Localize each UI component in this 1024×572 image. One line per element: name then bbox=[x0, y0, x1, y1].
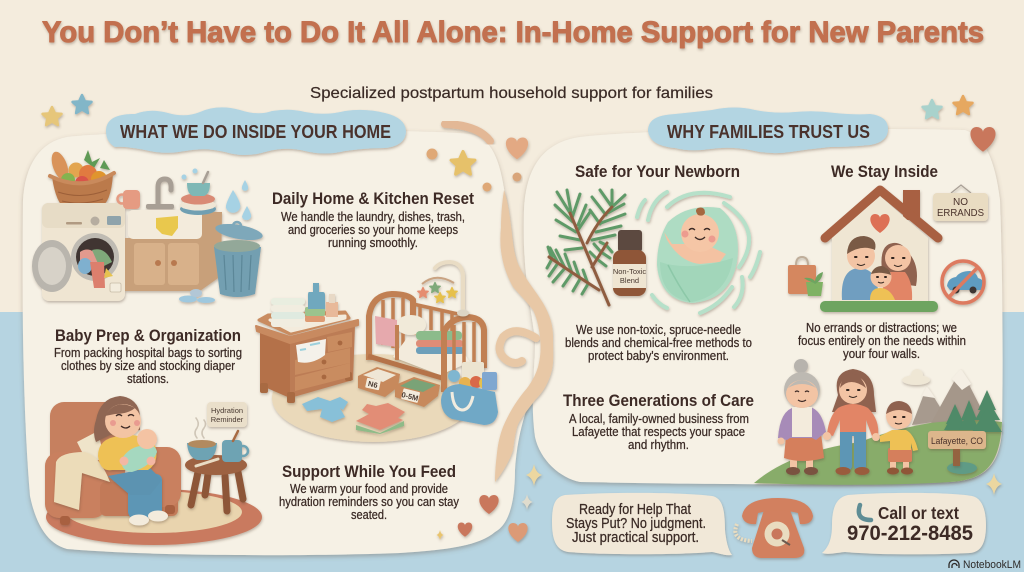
text: support while you feed bbox=[279, 462, 460, 522]
icon: steam bbox=[195, 418, 206, 438]
decor: heart top right bbox=[970, 127, 996, 152]
icon: non-toxic blend bottle: Blend bbox=[620, 276, 639, 285]
landscape: mountains and cloud bbox=[902, 369, 987, 425]
icon: folded clothes bbox=[356, 403, 405, 434]
icon: baby mobile bbox=[418, 262, 469, 316]
text: daily home bbox=[272, 189, 474, 250]
decorative stars top right bbox=[922, 96, 972, 118]
icon: non-toxic blend bottle: Non-Toxic bbox=[613, 267, 646, 276]
text: daily home: Daily Home & Kitchen Reset bbox=[272, 189, 474, 208]
icon: labeled storage boxes bbox=[358, 367, 440, 407]
icon: diaper bag bbox=[441, 362, 498, 425]
decor: hearts bottom right bbox=[436, 495, 499, 540]
illustration: mother feeding bbox=[45, 396, 262, 545]
rug: nursery bbox=[272, 354, 474, 442]
icon: house and family bbox=[820, 190, 938, 312]
background: cream upper area bbox=[0, 0, 1024, 312]
text: support while you feed: We warm your food and provide bbox=[290, 482, 448, 496]
decor: lower hearts and sparkles bbox=[508, 464, 1002, 542]
icon: crib bbox=[368, 294, 484, 392]
banner: what we do bbox=[106, 107, 406, 155]
decor: star and dots bbox=[426, 148, 492, 192]
illustration: laundry and kitchen bbox=[32, 150, 264, 303]
text: safe body: We use non-toxic, spruce-needle bbox=[576, 323, 741, 337]
note: hydration reminder bbox=[207, 402, 247, 427]
icon: water spill bbox=[179, 289, 215, 303]
text: daily home: running smoothly. bbox=[328, 236, 418, 250]
text: baby prep: From packing hospital bags to sorting bbox=[54, 346, 242, 360]
text: three generations: A local, family-owned business from bbox=[569, 412, 749, 426]
panel: why families trust us bbox=[524, 108, 1003, 485]
speech bubble: call or text bbox=[822, 493, 986, 554]
text: baby prep bbox=[54, 326, 242, 386]
icon: dresser bbox=[256, 283, 358, 403]
watermark: NotebookLM: NotebookLM bbox=[963, 559, 1021, 571]
decor: dot near ribbon bbox=[512, 172, 522, 182]
icon: grocery basket bbox=[48, 150, 114, 209]
decor: ribbon between panels bbox=[495, 190, 553, 482]
text: stay inside body: No errands or distractions; we bbox=[806, 321, 957, 335]
text: three generations bbox=[563, 391, 754, 452]
subtitle: Specialized postpartum household support for families bbox=[310, 85, 713, 102]
icon: armchair bbox=[45, 402, 181, 525]
icon: labeled storage boxes: 0-5M bbox=[400, 390, 419, 403]
figure: grandmother bbox=[778, 359, 826, 475]
note: hydration reminder: Reminder bbox=[211, 415, 244, 424]
icon: spruce branch bbox=[547, 190, 625, 305]
text: safe body: protect baby's environment. bbox=[588, 349, 729, 363]
landscape: green hill bbox=[754, 420, 1002, 485]
banner: why families trust us bbox=[648, 108, 888, 153]
text: support while you feed: seated. bbox=[351, 508, 387, 522]
icon: onesie bbox=[302, 397, 348, 422]
title: You Don’t Have to Do It All Alone: In-Home Support for New Parents bbox=[42, 16, 984, 49]
text: safe body bbox=[565, 323, 752, 363]
sign: no errands: NO bbox=[953, 197, 968, 208]
speech bubble: ready for help: Just practical support. bbox=[572, 530, 699, 546]
text: baby prep: clothes by size and stocking diaper bbox=[61, 359, 235, 373]
sign: no errands bbox=[933, 185, 988, 221]
text: support while you feed: Support While You Feed bbox=[282, 462, 456, 481]
text: daily home: We handle the laundry, dishes, trash, bbox=[281, 210, 465, 224]
text: three generations: and rhythm. bbox=[628, 438, 689, 452]
speech bubble: call or text: Call or text bbox=[878, 503, 959, 523]
text: daily home: and groceries so your home keeps bbox=[288, 223, 458, 237]
icon: table with bowl and mug bbox=[185, 431, 248, 511]
icon: phone handset bbox=[859, 505, 871, 520]
icon: washing machine bbox=[32, 203, 125, 301]
text: support while you feed: hydration reminders so you can stay bbox=[279, 495, 460, 509]
icon: rotary telephone bbox=[735, 498, 813, 558]
rug: feeding area bbox=[46, 489, 262, 545]
icon: shopping bag and plant bbox=[788, 257, 823, 296]
banner: what we do: WHAT WE DO INSIDE YOUR HOME bbox=[120, 122, 391, 142]
icon: swaddled baby bbox=[637, 192, 760, 313]
background: blue lower area bbox=[0, 312, 1024, 572]
text: we stay inside heading: We Stay Inside bbox=[831, 162, 938, 181]
banner: why families trust us: WHY FAMILIES TRUST US bbox=[667, 122, 870, 142]
note: hydration reminder: Hydration bbox=[211, 406, 243, 415]
speech bubble: ready for help bbox=[552, 493, 732, 555]
text: baby prep: Baby Prep & Organization bbox=[55, 326, 241, 345]
icon: non-toxic blend bottle bbox=[613, 230, 646, 296]
text: safe body: blends and chemical-free methods to bbox=[565, 336, 752, 350]
decor: clay squiggle bbox=[445, 124, 490, 141]
illustration: landscape and three generations bbox=[754, 359, 1002, 485]
figure: child bbox=[880, 401, 918, 474]
speech bubble: call or text: 970-212-8485 bbox=[847, 522, 973, 545]
icon: mug and plates bbox=[118, 172, 216, 215]
text: stay inside body: your four walls. bbox=[843, 347, 920, 361]
text: three generations: Three Generations of Care bbox=[563, 391, 754, 410]
text: stay inside body: focus entirely on the needs within bbox=[798, 334, 966, 348]
icon: kitchen sink cabinet bbox=[125, 179, 222, 291]
figure: mother bbox=[823, 369, 880, 475]
icon: blanket bbox=[54, 452, 110, 510]
landscape: pine trees bbox=[944, 390, 1002, 474]
text: safe for your newborn heading: Safe for Your Newborn bbox=[575, 162, 740, 181]
icon: no driving bbox=[942, 261, 984, 303]
icon: trash can bbox=[214, 221, 264, 297]
sign: no errands: ERRANDS bbox=[937, 208, 984, 219]
icon: labeled storage boxes: N6 bbox=[367, 379, 379, 390]
text: baby prep: stations. bbox=[127, 372, 169, 386]
figure: mother and baby bbox=[94, 396, 168, 526]
illustration: nursery bbox=[256, 262, 498, 442]
speech bubble: ready for help: Stays Put? No judgment. bbox=[566, 516, 706, 532]
sign: lafayette, co bbox=[928, 431, 986, 466]
panel: what we do bbox=[23, 107, 544, 555]
text: stay inside body bbox=[798, 321, 966, 361]
speech bubble: ready for help: Ready for Help That bbox=[579, 502, 691, 518]
decor: heart near ribbon bbox=[506, 138, 528, 159]
sign: lafayette, co: Lafayette, CO bbox=[931, 436, 983, 447]
text: three generations: Lafayette that respects your space bbox=[572, 425, 745, 439]
icon: water drops bbox=[182, 168, 251, 220]
decorative stars top left bbox=[42, 95, 92, 125]
